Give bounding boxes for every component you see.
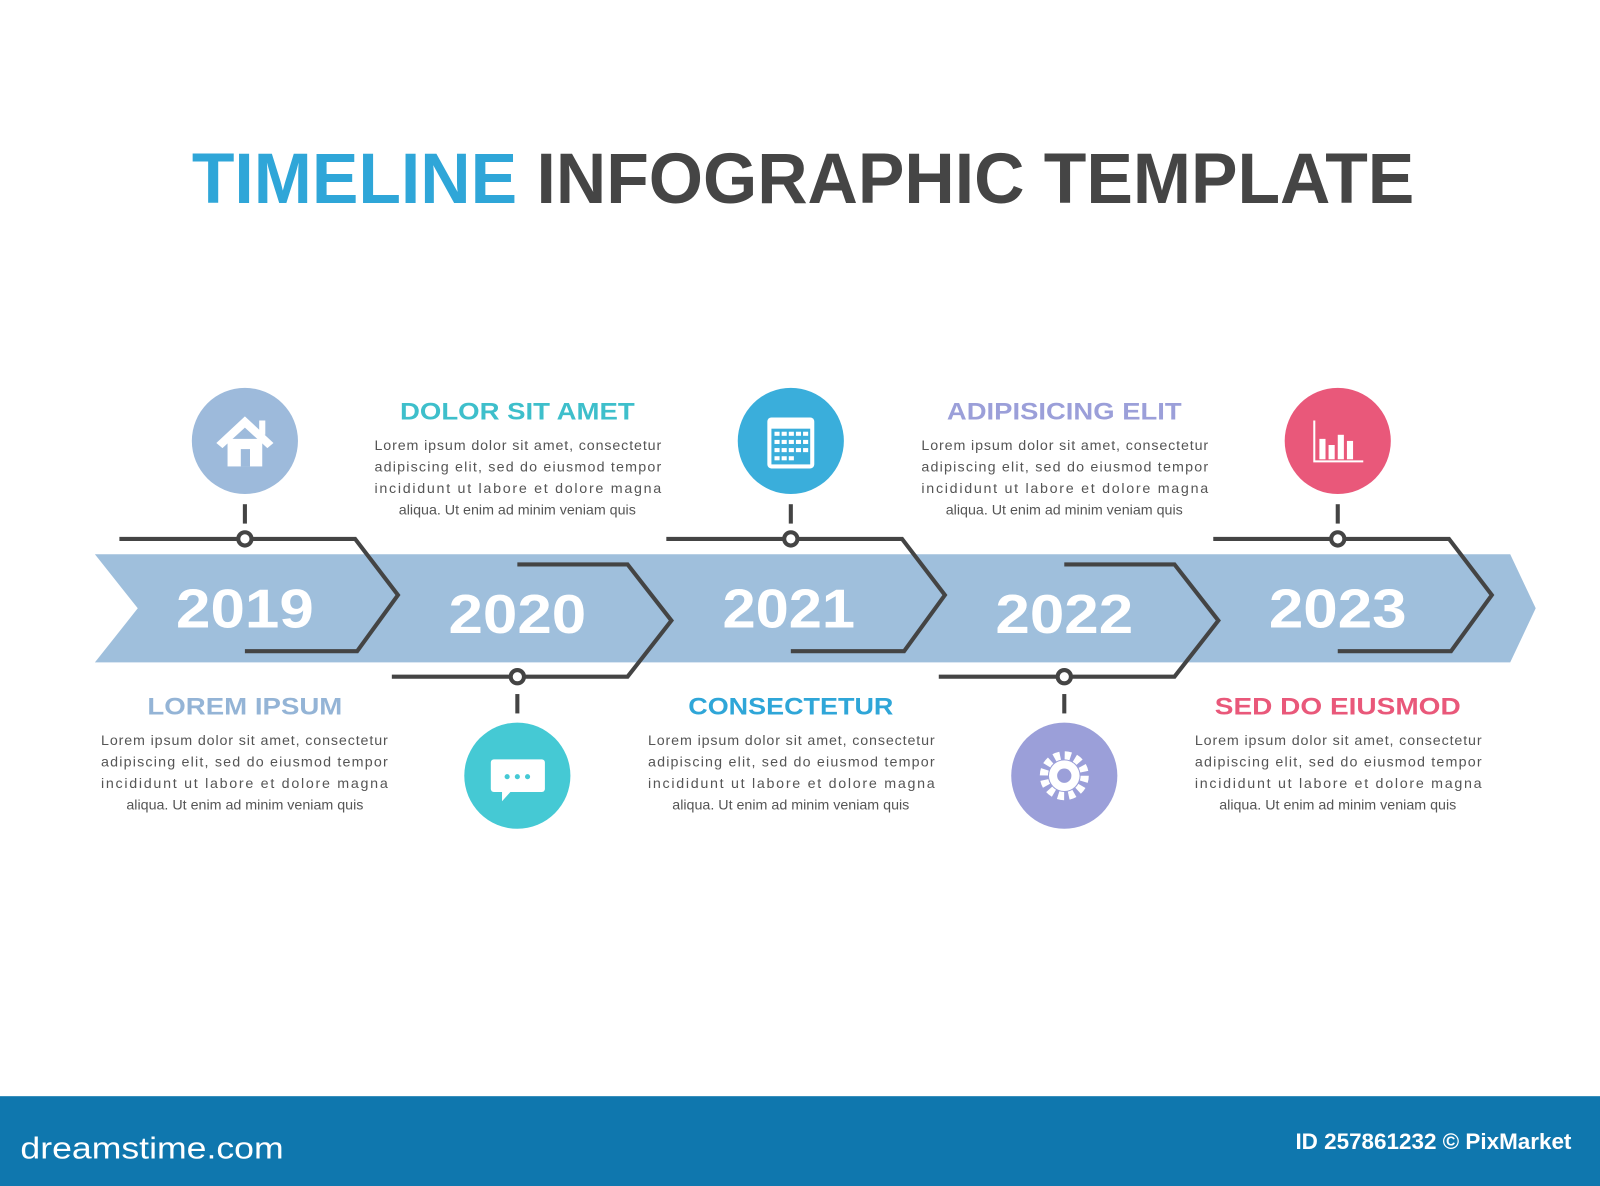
block: consectetur: aliqua. Ut enim ad minim veniam quis	[672, 797, 909, 813]
block: lorem ipsum: adipiscing elit, sed do eiusmod tempor	[101, 755, 388, 771]
icon: calendar	[738, 388, 844, 494]
footer bar: dreamstime.com	[20, 1131, 284, 1165]
block: lorem ipsum: incididunt ut labore et dolore magna	[101, 776, 388, 792]
connectors	[119, 504, 1492, 713]
block: dolor sit amet	[374, 398, 661, 518]
block: consectetur: Lorem ipsum dolor sit amet, consectetur	[648, 733, 935, 749]
block: adipisicing elit: ADIPISICING ELIT	[947, 398, 1182, 425]
block: consectetur: adipiscing elit, sed do eiusmod tempor	[648, 755, 935, 771]
years	[176, 578, 1407, 645]
block: lorem ipsum: aliqua. Ut enim ad minim veniam quis	[126, 797, 363, 813]
block: sed do eiusmod: incididunt ut labore et dolore magna	[1195, 776, 1482, 792]
block: dolor sit amet: Lorem ipsum dolor sit amet, consectetur	[374, 438, 661, 454]
years: 2020	[448, 583, 586, 645]
title: TIMELINE INFOGRAPHIC TEMPLATE	[192, 139, 1414, 219]
footer bar: ID 257861232 © PixMarket	[1295, 1129, 1572, 1154]
block: dolor sit amet: DOLOR SIT AMET	[400, 398, 635, 425]
block: adipisicing elit: incididunt ut labore et dolore magna	[921, 481, 1208, 497]
block: consectetur: incididunt ut labore et dolore magna	[648, 776, 935, 792]
icon: gear	[1011, 723, 1117, 829]
icon: home	[192, 388, 298, 494]
block: sed do eiusmod: adipiscing elit, sed do eiusmod tempor	[1195, 755, 1482, 771]
block: lorem ipsum	[101, 693, 388, 813]
years: 2019	[176, 578, 314, 640]
block: dolor sit amet: adipiscing elit, sed do eiusmod tempor	[374, 460, 661, 476]
years: 2022	[995, 583, 1133, 645]
icon: chart	[1285, 388, 1391, 494]
block: lorem ipsum: Lorem ipsum dolor sit amet, consectetur	[101, 733, 388, 749]
text blocks	[101, 398, 1482, 813]
block: adipisicing elit: Lorem ipsum dolor sit amet, consectetur	[921, 438, 1208, 454]
block: sed do eiusmod: aliqua. Ut enim ad minim veniam quis	[1219, 797, 1456, 813]
icon: chat	[464, 723, 570, 829]
footer bar	[0, 1096, 1600, 1186]
years: 2023	[1269, 578, 1407, 640]
block: lorem ipsum: LOREM IPSUM	[147, 693, 342, 720]
block: consectetur: CONSECTETUR	[688, 693, 894, 720]
block: adipisicing elit	[921, 398, 1208, 518]
block: consectetur	[648, 693, 935, 813]
block: sed do eiusmod: Lorem ipsum dolor sit amet, consectetur	[1195, 733, 1482, 749]
block: sed do eiusmod	[1195, 693, 1482, 813]
block: dolor sit amet: incididunt ut labore et dolore magna	[374, 481, 661, 497]
block: adipisicing elit: adipiscing elit, sed do eiusmod tempor	[921, 460, 1208, 476]
timeline band arrow	[95, 554, 1536, 662]
block: adipisicing elit: aliqua. Ut enim ad minim veniam quis	[946, 502, 1183, 518]
years: 2021	[722, 578, 855, 640]
block: dolor sit amet: aliqua. Ut enim ad minim veniam quis	[399, 502, 636, 518]
block: sed do eiusmod: SED DO EIUSMOD	[1215, 693, 1461, 720]
